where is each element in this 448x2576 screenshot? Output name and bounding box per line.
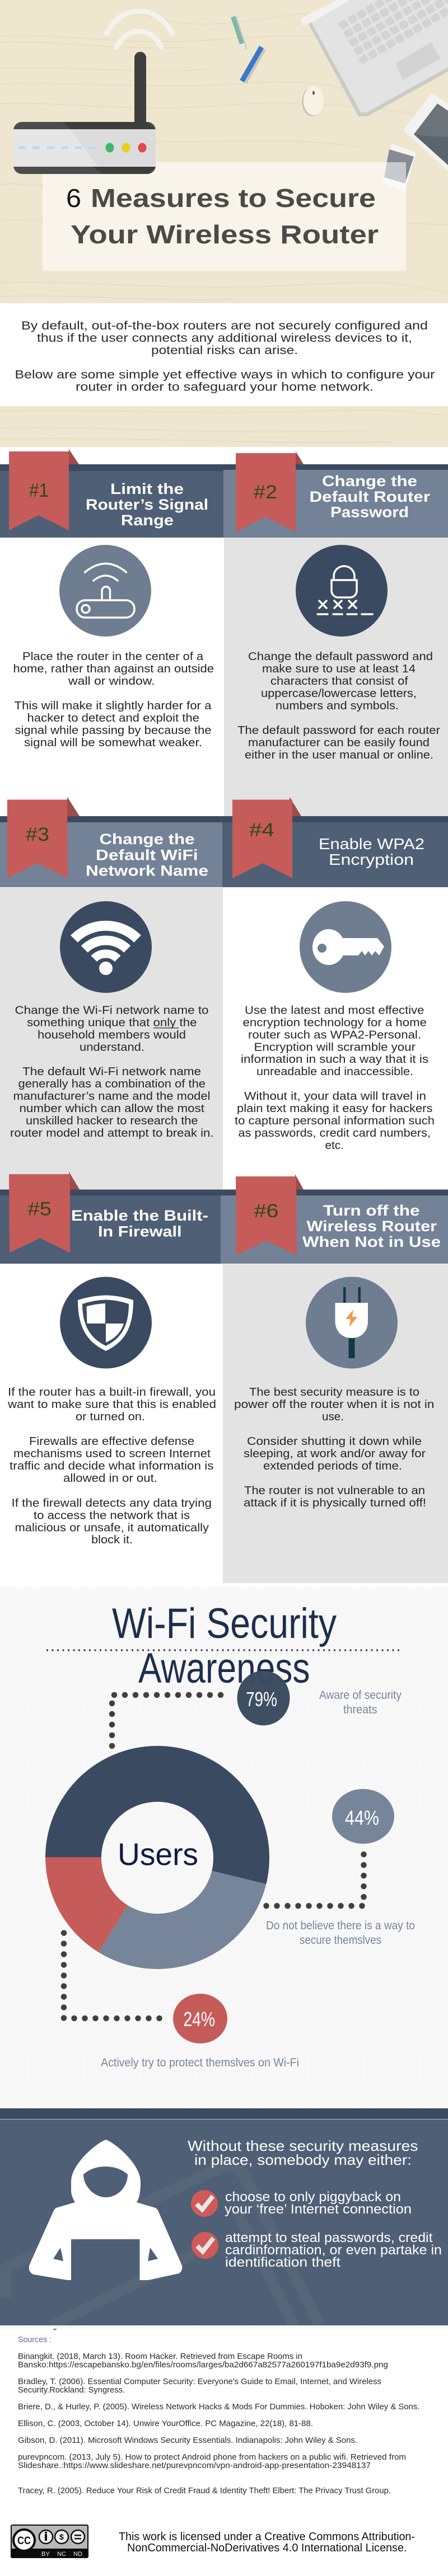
sources list: Sources : [18, 2335, 52, 2344]
heading 2: Change the [322, 473, 417, 489]
heading 3: Default WiFi [96, 847, 198, 864]
text: measure 6 [234, 1386, 435, 1509]
text: measure 4: Use the latest and most effective [245, 1005, 424, 1017]
intro text: router in order to safeguard your home network. [76, 380, 374, 394]
icon: creative commons badge: ND [73, 2551, 82, 2558]
text: measure 5 [7, 1386, 216, 1546]
text: measure 6: The best security measure is to [249, 1386, 419, 1398]
intro text [15, 319, 435, 394]
stat: 44%: Do not believe there is a way to [266, 1919, 415, 1932]
title text: Your Wireless Router [71, 220, 379, 249]
text: measure 5: If the firewall detects any data trying [11, 1497, 212, 1509]
icon: creative commons badge: NC [57, 2551, 66, 2558]
icon: router outline [59, 545, 151, 637]
heading 2: Default Router [309, 488, 431, 505]
stat: 24% [64, 1933, 299, 2069]
stat: 79% [112, 1670, 402, 1749]
license text: NonCommercial-NoDerivatives 4.0 International License. [127, 2542, 407, 2554]
text: measure 4: information in such a way that it is [241, 1053, 428, 1066]
stat: 44% [264, 1789, 415, 1947]
intro text: thus if the user connects any additional wireless devices to it, [37, 332, 412, 345]
intro text: potential risks can arise. [151, 344, 298, 357]
measure 4 header [222, 797, 448, 887]
text: measure 2: uppercase/lowercase letters, [261, 687, 417, 700]
icon: power plug [306, 1277, 398, 1368]
panel: hacker warning [0, 2108, 448, 2325]
text: measure 3: understand. [80, 1042, 144, 1054]
illustration: pens [233, 17, 264, 82]
icon: wifi [60, 901, 152, 993]
list item: theft: cardinformation, or even partake in [225, 2243, 442, 2258]
text: measure 2: Change the default password and [248, 651, 433, 663]
text: measure 4: unreadable and inaccessible. [256, 1066, 413, 1078]
text: measure 2: manufacturer can be easily found [248, 737, 430, 749]
text: measure 5: want to make sure that this is enabled [7, 1398, 216, 1411]
text: measure 3: household members would [38, 1029, 186, 1042]
awareness title: Awareness [138, 1645, 310, 1692]
measure 6 header [221, 1174, 448, 1264]
icon: hooded hacker [29, 2140, 182, 2280]
illustration: small phone [384, 145, 414, 190]
ribbon #1: #1 [29, 480, 49, 501]
sources list: Tracey, R. (2005). Reduce Your Risk of Credit Fraud & Identity Theft! Elbert: The Privacy Trust Group. [18, 2486, 391, 2495]
text: measure 5: traffic and decide what information is [10, 1460, 214, 1472]
text: measure 5: mechanisms used to screen Internet [13, 1448, 211, 1460]
heading 4: Encryption [329, 851, 414, 868]
measure 2 header [223, 451, 448, 538]
heading 2 [309, 473, 431, 520]
text: measure 4: as passwords, credit card numbers, [239, 1127, 431, 1139]
sources list: Security.Rockland: Syngress. [18, 2385, 125, 2395]
ribbon #6 [236, 1174, 304, 1255]
list item: theft [192, 2230, 442, 2270]
list item: piggyback: choose to only piggyback on [225, 2189, 401, 2205]
heading 3: Change the [100, 831, 195, 847]
intro band [0, 303, 448, 406]
sources list: Slideshare.:https://www.slideshare.net/purevpncom/vpn-android-app-presentation-23948137 [18, 2461, 371, 2470]
ribbon #2 [236, 451, 304, 532]
icon: creative commons badge [11, 2525, 88, 2558]
ribbon #2: #2 [254, 482, 277, 503]
illustration: router with wifi signal [13, 11, 172, 174]
warning heading: Without these security measures [188, 2137, 418, 2154]
heading 3 [86, 831, 208, 879]
sources list: purevpncom. (2013, July 5). How to protect Android phone from hackers on a public wifi. Retrieved from [18, 2452, 406, 2462]
text: measure 4 [235, 1005, 435, 1152]
text: measure 6: power off the router when it is not in [234, 1398, 435, 1411]
stat: 79%: 79% [246, 1688, 277, 1711]
text: measure 1: wall or window. [68, 675, 155, 687]
heading 4: Enable WPA2 [319, 835, 424, 853]
text: measure 1 [13, 651, 214, 749]
heading 6: Turn off the [323, 1202, 420, 1219]
illustration: laptop [300, 0, 448, 116]
illustration: mouse [302, 86, 324, 116]
sources list: Bansko:https://escapebansko.bg/en/files/rooms/larges/ba2d667a82577a260197f1ba9e2d93f9.png [18, 2360, 388, 2370]
text: measure 3: number which can allow the most [19, 1103, 204, 1115]
measure 1 header [0, 449, 223, 538]
sources list: Bradley, T. (2006). Essential Computer Security: Everyone's Guide to Email, Internet, and Wireless [18, 2377, 381, 2386]
text: measure 6: sleeping, at work and/or away for [244, 1448, 426, 1460]
text: measure 5: Firewalls are effective defense [29, 1435, 194, 1448]
text: measure 4: encryption technology for a home [243, 1017, 427, 1029]
text: measure 2: numbers and symbols. [276, 700, 399, 712]
text: measure 2 [237, 651, 440, 761]
ribbon #3: #3 [26, 824, 49, 845]
text: measure 6: The router is not vulnerable to an [244, 1485, 425, 1497]
ribbon #4 [232, 797, 301, 878]
text: measure 5: If the router has a built-in firewall, you [8, 1386, 216, 1398]
license text: This work is licensed under a Creative Commons Attribution- [119, 2531, 415, 2543]
ribbon #5 [9, 1171, 80, 1253]
title text: 6 [66, 183, 81, 213]
text: measure 3 [10, 1005, 214, 1139]
heading 3: Network Name [86, 863, 208, 879]
text: measure 5: allowed in or out. [63, 1472, 157, 1485]
list item: piggyback: your ‘free’ Internet connection [225, 2202, 412, 2217]
text: measure 4: to capture personal information such [235, 1115, 435, 1127]
text: measure 4: router such as WPA2-Personal. [248, 1029, 421, 1042]
text: measure 1: home, rather than against an outside [13, 663, 214, 675]
heading 1: Range [121, 512, 174, 529]
text: measure 6: Consider shutting it down while [247, 1435, 422, 1448]
text: measure 1: signal will be somewhat weaker. [24, 737, 202, 749]
text: measure 2: either in the user manual or online. [245, 749, 433, 761]
text: measure 2: characters that consist of [270, 675, 408, 687]
stat: 44%: secure themslves [300, 1934, 381, 1947]
icon: shield [60, 1277, 152, 1368]
text: measure 6: use. [322, 1411, 344, 1423]
illustration: large phone [406, 96, 448, 168]
sources list: Ellison, C. (2003, October 14). Unwire YourOffice. PC Magazine, 22(18), 81-88. [18, 2419, 313, 2428]
panel: Wi-Fi security awareness [0, 1587, 448, 2108]
text: measure 1: Place the router in the center of a [22, 651, 204, 663]
intro text: Below are some simple yet effective ways in which to configure your [15, 368, 435, 382]
text: measure 6: extended periods of time. [263, 1460, 402, 1472]
text: measure 1: This will make it slightly harder for a [15, 700, 212, 712]
icon: creative commons badge: CC [17, 2535, 31, 2547]
list item: theft: identification theft [225, 2255, 340, 2270]
heading 1: Router’s Signal [86, 496, 208, 513]
text: measure 5: or turned on. [76, 1411, 145, 1423]
text: measure 3: Change the Wi-Fi network name to [15, 1005, 208, 1017]
license text [119, 2531, 415, 2554]
icon: key [300, 901, 391, 993]
list item: theft: attempt to steal passwords, credit [225, 2230, 433, 2245]
text: measure 3: manufacturer’s name and the model [13, 1090, 211, 1103]
text: measure 4: etc. [325, 1139, 344, 1152]
intro text: By default, out-of-the-box routers are not securely configured and [21, 319, 428, 332]
sources list: Briere, D., & Hurley, P. (2005). Wireless Network Hacks & Mods For Dummies. Hoboken: John Wiley & Sons. [18, 2402, 420, 2412]
title text [66, 183, 379, 249]
heading 2: Password [330, 503, 409, 520]
text: measure 2: The default password for each router [237, 724, 440, 737]
heading 6 [302, 1202, 441, 1250]
ribbon #1 [9, 449, 79, 530]
text: measure 3: router model and attempt to break in. [10, 1127, 214, 1139]
text: measure 6: attack if it is physically turned off! [244, 1497, 426, 1509]
stat: 24%: Actively try to protect themslves on Wi-Fi [101, 2056, 299, 2069]
donut chart [45, 1746, 269, 1969]
measure 5 and 6 background [0, 1189, 448, 1583]
icon: password lock [296, 545, 388, 637]
text: measure 4: plain text making it easy for hackers [237, 1103, 432, 1115]
sources list: Gibson, D. (2011). Microsoft Windows Security Essentials. Indianapolis: John Wiley & Sons. [18, 2436, 357, 2445]
icon: creative commons badge: BY [41, 2551, 50, 2558]
text: measure 3: The default Wi-Fi network name [22, 1066, 201, 1078]
measure 3 header [0, 797, 222, 887]
stat: 79%: threats [343, 1703, 377, 1716]
ribbon #3 [7, 797, 80, 878]
sources list [0, 2325, 448, 2495]
text: measure 1: signal while passing by because the [15, 724, 212, 737]
stat: 24%: 24% [184, 2008, 215, 2031]
text: measure 3: generally has a combination of the [18, 1078, 206, 1090]
heading 5: In Firewall [98, 1223, 181, 1240]
hero: wooden desk background [0, 0, 448, 447]
list item: piggyback [191, 2189, 412, 2217]
measure 5 header [0, 1171, 221, 1264]
heading 5 [71, 1207, 208, 1240]
heading 1 [86, 481, 208, 529]
ribbon #6: #6 [254, 1200, 279, 1222]
stat: 44%: 44% [345, 1806, 379, 1829]
ribbon #5: #5 [28, 1198, 52, 1219]
awareness title [46, 1600, 402, 1692]
stat: 79%: Aware of security [319, 1689, 402, 1702]
text: measure 5: malicious or unsafe, it automatically [15, 1522, 209, 1534]
warning heading [188, 2137, 418, 2168]
title text: Measures to Secure [91, 183, 376, 213]
heading 4 [319, 835, 424, 868]
text: measure 4: Without it, your data will travel in [244, 1090, 426, 1103]
text: measure 2: make sure to use at least 14 [262, 663, 416, 675]
text: measure 5: to access the network that is [34, 1509, 190, 1522]
awareness title: Wi-Fi Security [112, 1600, 337, 1647]
heading 5: Enable the Built- [71, 1207, 208, 1224]
ribbon #4: #4 [249, 820, 274, 841]
heading 6: Wireless Router [307, 1218, 437, 1235]
measure 1 and 2 background [0, 464, 448, 816]
title panel [43, 162, 406, 271]
warning heading: in place, somebody may either: [194, 2151, 412, 2168]
measure 3 and 4 background [0, 816, 448, 1190]
heading 6: When Not in Use [302, 1233, 441, 1250]
heading 1: Limit the [110, 481, 184, 497]
sources list: Binangkit. (2018, March 13). Room Hacker. Retrieved from Escape Rooms in [18, 2352, 302, 2361]
text: measure 4: Encryption will scramble your [254, 1042, 416, 1054]
text: measure 3: something unique that only the [27, 1017, 197, 1029]
text: measure 5: block it. [91, 1534, 133, 1546]
text: measure 1: hacker to detect and exploit the [27, 712, 199, 724]
text: measure 3: unskilled hacker to research the [26, 1115, 198, 1127]
donut chart: Users [118, 1836, 198, 1872]
icon: creative commons badge: $ [59, 2532, 64, 2541]
